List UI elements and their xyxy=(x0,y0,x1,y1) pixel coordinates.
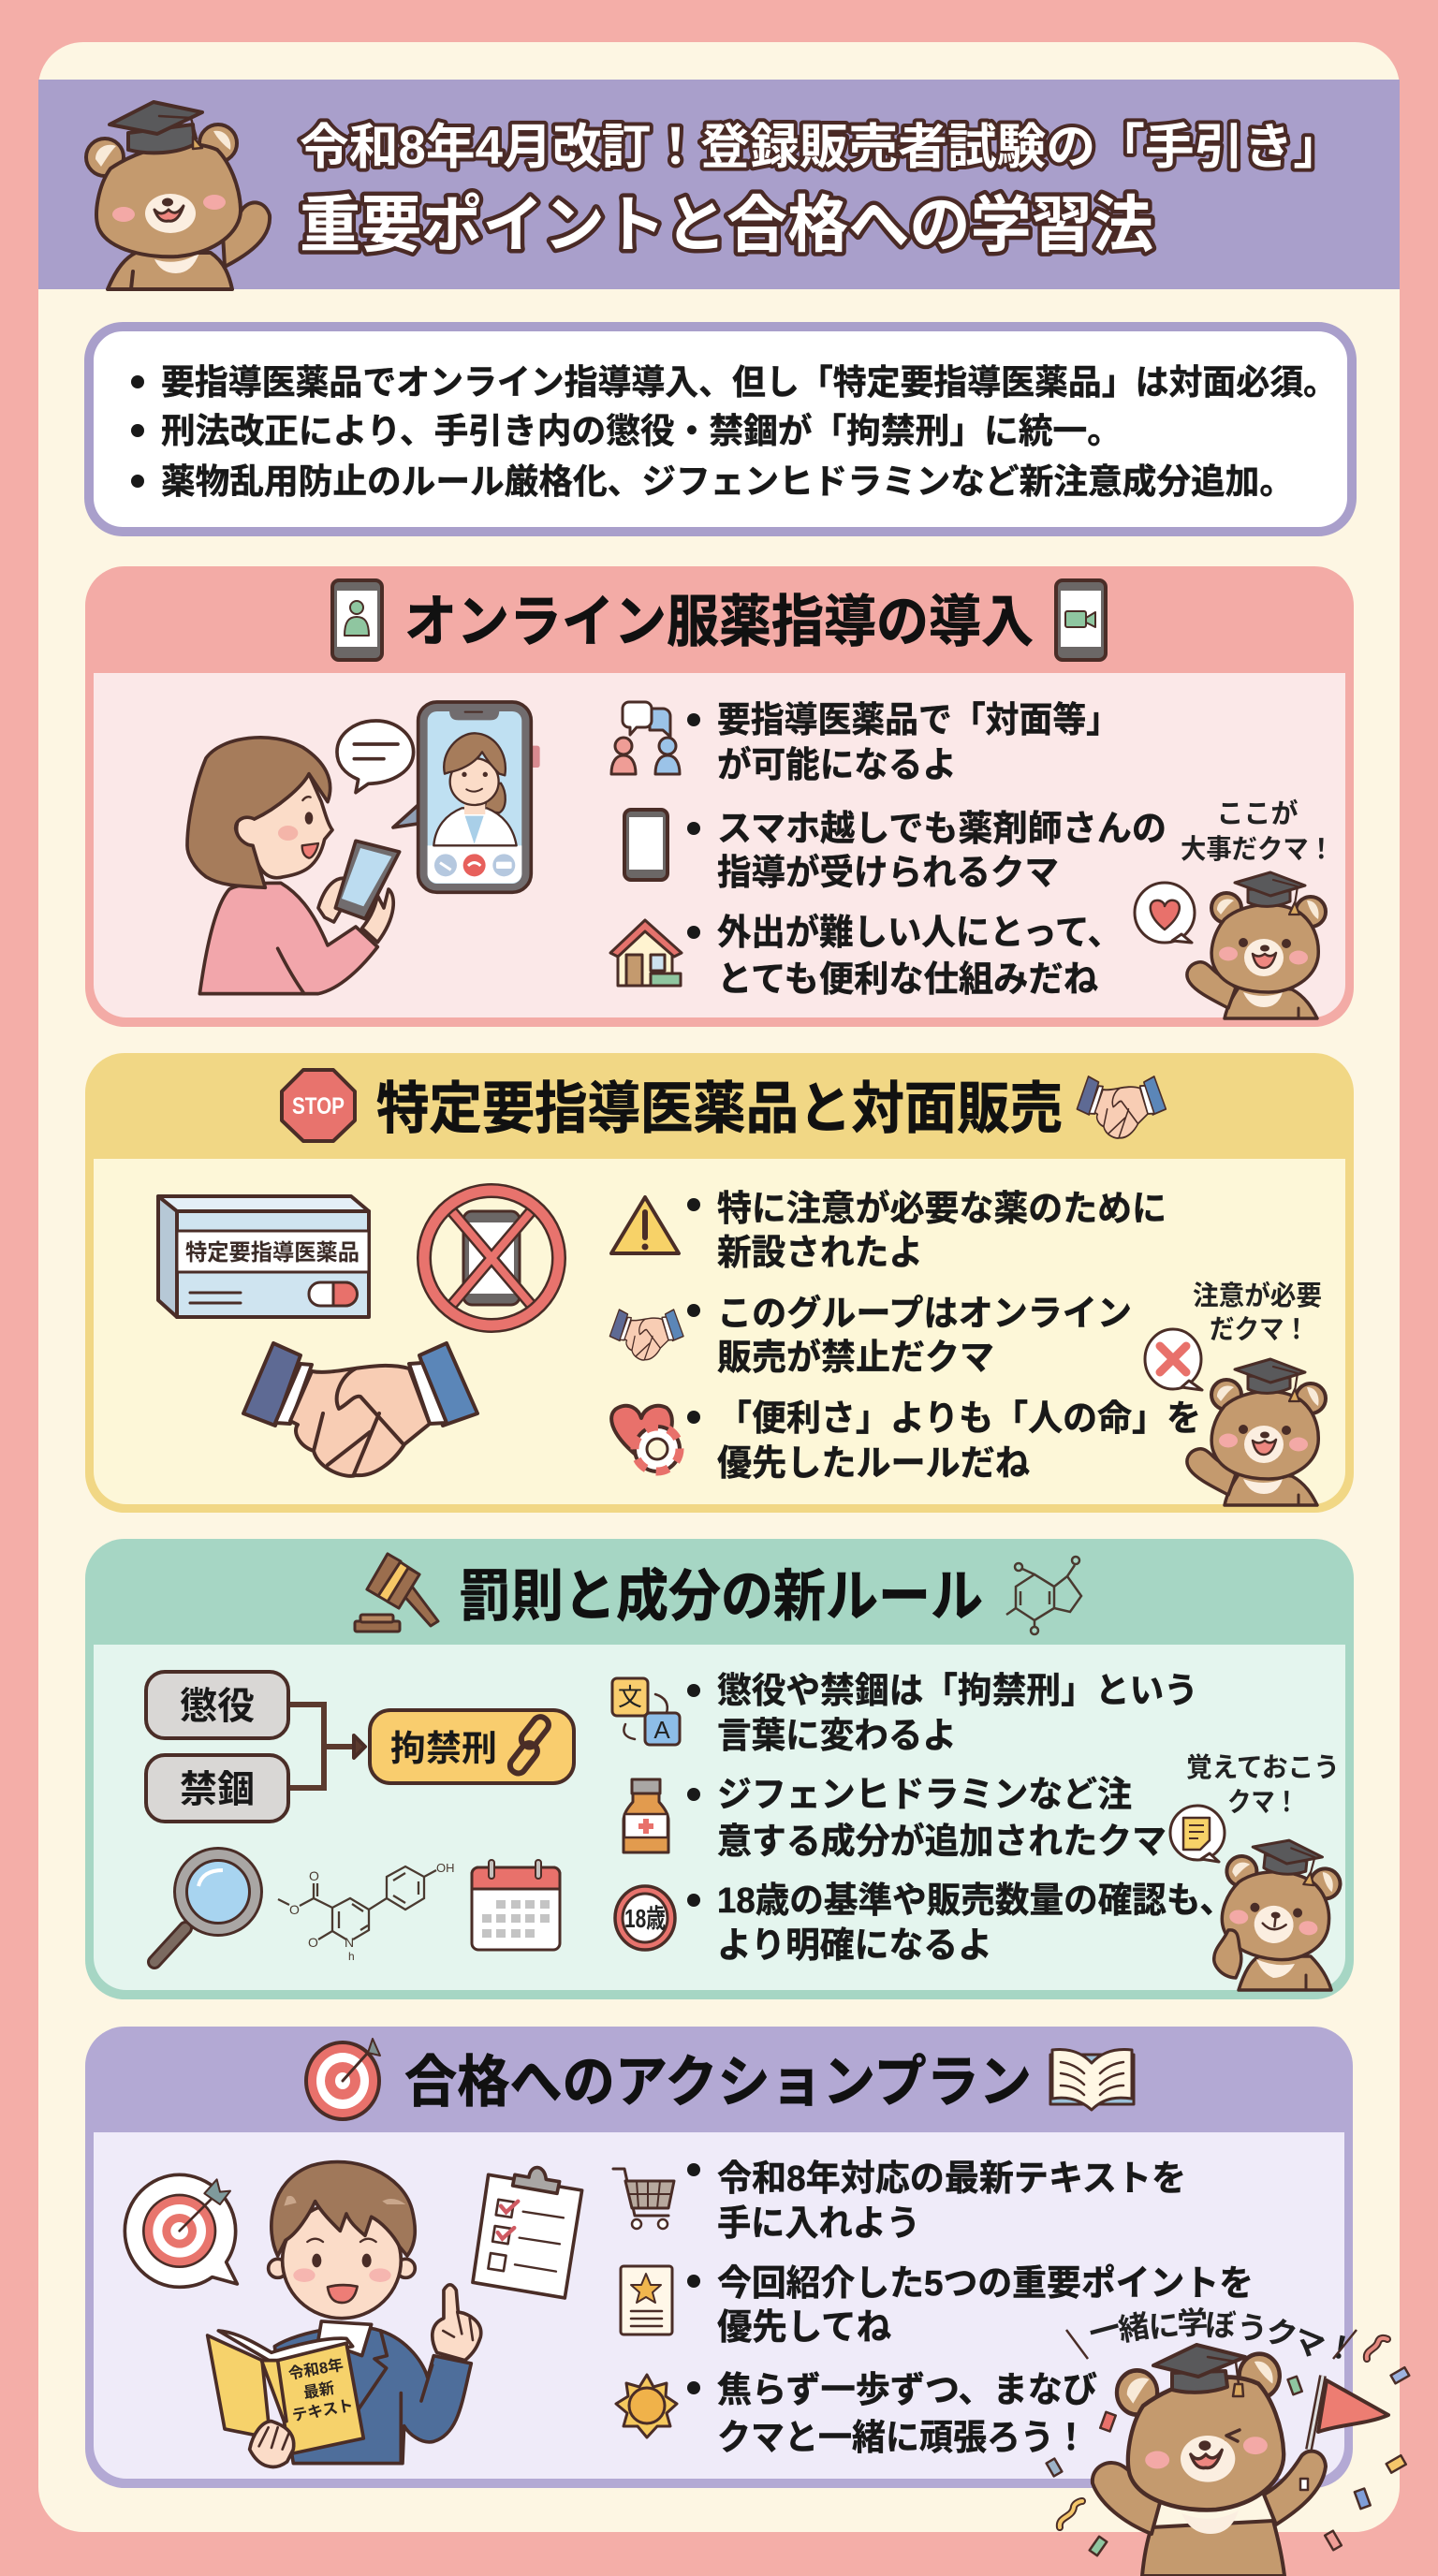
suit xyxy=(274,2327,471,2464)
illustration: medicine box xyxy=(158,1196,369,1317)
illustration: molecule formula: OH xyxy=(436,1861,455,1875)
bullet list: 外出が難しい人にとって、 xyxy=(717,914,1122,953)
illustration: phone prohibited xyxy=(424,1191,559,1325)
bullet list: 焦らず一歩ずつ、まなび xyxy=(717,2371,1097,2410)
icon: translation: 文 xyxy=(618,1683,642,1711)
icon: smartphone xyxy=(624,810,668,880)
icon: age 18 sign xyxy=(615,1886,675,1950)
confetti xyxy=(1047,2338,1409,2555)
heading: 罰則と成分の新ルール xyxy=(459,1565,983,1628)
icon: gavel xyxy=(355,1554,438,1632)
icon: heart and lifebuoy xyxy=(611,1406,680,1471)
title: 令和8年4月改訂！登録販売者試験の「手引き」 xyxy=(300,121,1343,175)
heading: 特定要指導医薬品と対面販売 xyxy=(376,1077,1063,1140)
bullet list: このグループはオンライン xyxy=(717,1295,1132,1334)
icon: small handshake xyxy=(609,1310,683,1360)
icon: cross bubble xyxy=(1145,1329,1202,1390)
bullet list: とても便利な仕組みだね xyxy=(717,960,1098,1000)
pill: kokinkei xyxy=(370,1710,574,1783)
icon: medicine bottle xyxy=(624,1779,668,1852)
panel: penalties and ingredients xyxy=(85,1539,1354,1999)
woman xyxy=(187,738,400,994)
bullet list: 優先してね xyxy=(717,2308,891,2348)
illustration: woman on video call xyxy=(187,702,540,994)
bullet list: 新設されたよ xyxy=(717,1234,923,1273)
bullet list: 特に注意が必要な薬のために xyxy=(717,1190,1167,1229)
illustration: magnifier xyxy=(154,1854,256,1962)
mascot: thinking bear xyxy=(1214,1835,1344,1990)
bullet list: より明確になるよ xyxy=(717,1926,992,1966)
bullet list: 販売が禁止だクマ xyxy=(717,1339,994,1378)
textbook: テキスト xyxy=(290,2396,355,2424)
bullet list xyxy=(687,1190,1201,1484)
icon: translation: A xyxy=(653,1716,670,1744)
icon: age 18 sign: 18歳 xyxy=(624,1904,666,1933)
icon: open book xyxy=(1050,2050,1134,2110)
illustration: molecule formula: h xyxy=(348,1950,355,1963)
summary box: 刑法改正により、手引き内の懲役・禁錮が「拘禁刑」に統一。 xyxy=(161,412,1122,450)
bullet list: が可能になるよ xyxy=(717,746,957,785)
bullet list xyxy=(687,2159,1254,2458)
textbook: 最新 xyxy=(302,2379,336,2402)
pill: kinko: 禁錮 xyxy=(180,1769,255,1810)
heading: オンライン服薬指導の導入 xyxy=(404,591,1034,653)
head xyxy=(1117,2354,1284,2510)
mascot callout text: 覚えておこう xyxy=(1186,1752,1340,1783)
icon: sun xyxy=(616,2375,677,2437)
bullet list: 意する成分が追加されたクマ xyxy=(717,1822,1167,1862)
title xyxy=(300,121,1343,259)
flag xyxy=(1309,2376,1323,2450)
bullet list: 言葉に変わるよ xyxy=(717,1717,957,1756)
icon: molecule xyxy=(1006,1557,1081,1634)
bullet list: 要指導医薬品で「対面等」 xyxy=(717,701,1120,740)
pill: kokinkei: 拘禁刑 xyxy=(390,1730,497,1769)
textbook xyxy=(208,2331,363,2466)
pointing hand xyxy=(433,2285,481,2361)
illustration: handshake xyxy=(243,1343,477,1476)
icon: two people chatting xyxy=(611,702,680,774)
bullet list: 優先したルールだね xyxy=(717,1444,1030,1484)
icon: target xyxy=(306,2039,380,2119)
icon: handshake xyxy=(1077,1076,1166,1138)
mascot callout text: 大事だクマ！ xyxy=(1181,834,1334,865)
clipboard xyxy=(473,2168,582,2298)
heading: 合格へのアクションプラン xyxy=(404,2051,1032,2114)
body xyxy=(1142,2521,1284,2576)
illustration: molecule formula: O xyxy=(308,1935,318,1950)
icon: note bubble xyxy=(1170,1806,1225,1862)
bullet list: 18歳の基準や販売数量の確認も、 xyxy=(717,1881,1234,1921)
exclamation text: 一緒に学ぼうクマ！ xyxy=(1085,2305,1359,2368)
bullet list: 手に入れよう xyxy=(717,2204,920,2244)
bullet list xyxy=(687,701,1167,1000)
icon: shopping cart xyxy=(613,2169,674,2229)
panel: designated drugs face-to-face xyxy=(85,1053,1354,1513)
summary box: 薬物乱用防止のルール厳格化、ジフェンヒドラミンなど新注意成分追加。 xyxy=(161,462,1294,501)
doctor phone xyxy=(393,702,540,892)
icon: phone with video xyxy=(1056,580,1106,660)
icon: checklist document xyxy=(621,2266,672,2334)
illustration: molecule formula: O xyxy=(289,1902,300,1917)
illustration: molecule formula: N xyxy=(345,1935,354,1950)
mascot callout text: だクマ！ xyxy=(1210,1315,1309,1345)
bullet list: 「便利さ」よりも「人の命」を xyxy=(717,1399,1201,1439)
mascot callout text xyxy=(1193,1280,1322,1345)
mascot callout text xyxy=(1181,798,1334,865)
icon: house xyxy=(610,920,682,986)
mascot: celebrating bear with flag xyxy=(1047,2305,1409,2576)
illustration: student with textbook xyxy=(125,2162,582,2466)
header banner xyxy=(38,80,1400,289)
bullet list: ジフェンヒドラミンなど注 xyxy=(717,1776,1132,1815)
icon: heart bubble xyxy=(1135,883,1195,943)
icon: translation xyxy=(612,1678,680,1745)
illustration: molecule formula: O xyxy=(309,1868,319,1883)
panel: online guidance xyxy=(85,566,1354,1027)
icon: stop sign: STOP xyxy=(292,1093,345,1120)
summary box: 要指導医薬品でオンライン指導導入、但し「特定要指導医薬品」は対面必須。 xyxy=(161,363,1337,402)
bullet list: 今回紹介した5つの重要ポイントを xyxy=(717,2264,1254,2304)
title: 重要ポイントと合格への学習法 xyxy=(300,190,1153,259)
pill: chouekei xyxy=(146,1672,288,1738)
icon: phone with person xyxy=(332,580,382,660)
diagram: terms merged xyxy=(146,1672,574,1822)
mascot: bear waving xyxy=(86,102,270,289)
pill: kinko xyxy=(146,1755,288,1822)
panel: action plan xyxy=(85,2027,1353,2488)
illustration: molecule formula xyxy=(278,1861,455,1963)
mascot callout text xyxy=(1186,1752,1340,1818)
bullet list: 令和8年対応の最新テキストを xyxy=(717,2159,1186,2199)
textbook: 令和8年 xyxy=(286,2355,345,2383)
summary box xyxy=(89,327,1352,532)
bullet list xyxy=(687,1672,1234,1966)
head xyxy=(269,2259,287,2277)
mascot callout text: ここが xyxy=(1216,798,1299,829)
illustration: calendar xyxy=(472,1860,560,1950)
pill: chouekei: 懲役 xyxy=(180,1686,255,1727)
bullet list: スマホ越しでも薬剤師さんの xyxy=(717,810,1167,849)
target bubble xyxy=(125,2174,237,2287)
icon: stop sign xyxy=(282,1070,355,1141)
mascot: bear xyxy=(1187,1359,1326,1505)
icon: warning triangle xyxy=(611,1197,679,1253)
bullet list: 指導が受けられるクマ xyxy=(717,854,1059,893)
bullet list: 懲役や禁錮は「拘禁刑」という xyxy=(717,1672,1198,1711)
speech bubble xyxy=(337,721,414,793)
bullet list: クマと一緒に頑張ろう！ xyxy=(717,2419,1088,2458)
mascot callout text: クマ！ xyxy=(1227,1788,1299,1818)
illustration: medicine box: 特定要指導医薬品 xyxy=(185,1240,360,1266)
mascot: bear xyxy=(1187,872,1326,1018)
mascot callout text: 注意が必要 xyxy=(1193,1280,1322,1311)
